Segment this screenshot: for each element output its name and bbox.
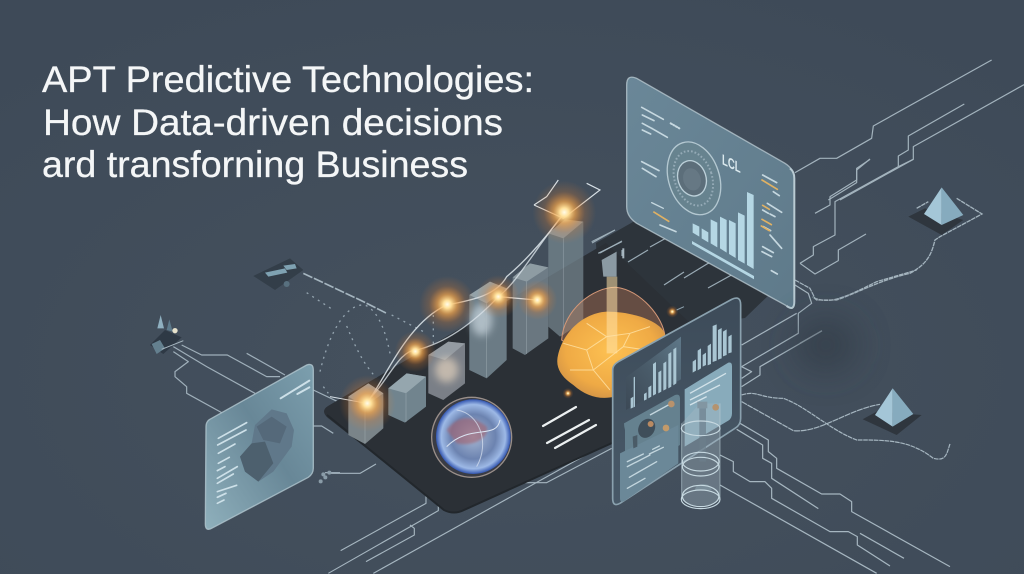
radial dial [658,135,730,222]
text lines on platform [543,407,596,448]
dotted arcs [307,293,433,393]
bar 2 [348,383,383,444]
circuit traces bottom centre [328,440,615,573]
platform edge [327,415,612,512]
platform [324,218,772,512]
device: left small hub [150,315,183,354]
bar 5 [469,282,507,378]
cylinder [681,402,720,509]
device: small connector dots [319,471,331,483]
brain network lines [563,323,650,390]
icon: circuit node devices [150,258,387,483]
brain [557,230,684,399]
circuit traces left [173,345,340,473]
circuit traces right of top panel [800,159,898,343]
bar 3 [388,373,426,423]
bar 7 [548,219,583,337]
chart upper right [693,324,732,373]
title line 3: ard transforning Business [42,143,468,185]
panel label: LCL [722,152,741,177]
panel: left pixel map [205,364,313,529]
pixel globe shape [240,409,294,482]
bar 4 [428,342,465,400]
text lines [217,381,309,503]
icon: upper pyramid [813,187,982,300]
left text lines [642,107,679,232]
panel: top dashboard [627,77,794,308]
growth lines [330,180,600,403]
brain dome outline [562,287,665,380]
circuit traces lower right [720,270,950,573]
bar chart: isometric glass bars [348,219,583,444]
title line 2: How Data-driven decisions [43,101,503,143]
globe [432,397,512,477]
platform short traces [592,230,755,288]
tile controls [620,395,680,502]
icon: lower pyramid [863,388,922,435]
panel shaded right edge [787,168,794,308]
tile right [685,362,732,447]
circuit traces top right [795,60,1024,200]
right text lines [762,175,782,274]
spark nodes [666,306,678,318]
brain body [557,312,665,398]
dark shadow on floor [794,317,858,373]
trend nodes [339,375,396,432]
title [42,58,534,185]
panel bar chart [692,192,754,279]
platform rear section [596,218,772,330]
chart tile left [626,337,681,410]
panel base [613,298,741,505]
growth line and glowing nodes [330,180,600,432]
device: upper left chip [253,258,387,313]
title line 1: APT Predictive Technologies: [42,58,534,100]
bar 6 [513,263,548,355]
panel: lower right dashboard [613,298,741,509]
light beam [607,277,617,353]
platform main surface [324,243,692,512]
